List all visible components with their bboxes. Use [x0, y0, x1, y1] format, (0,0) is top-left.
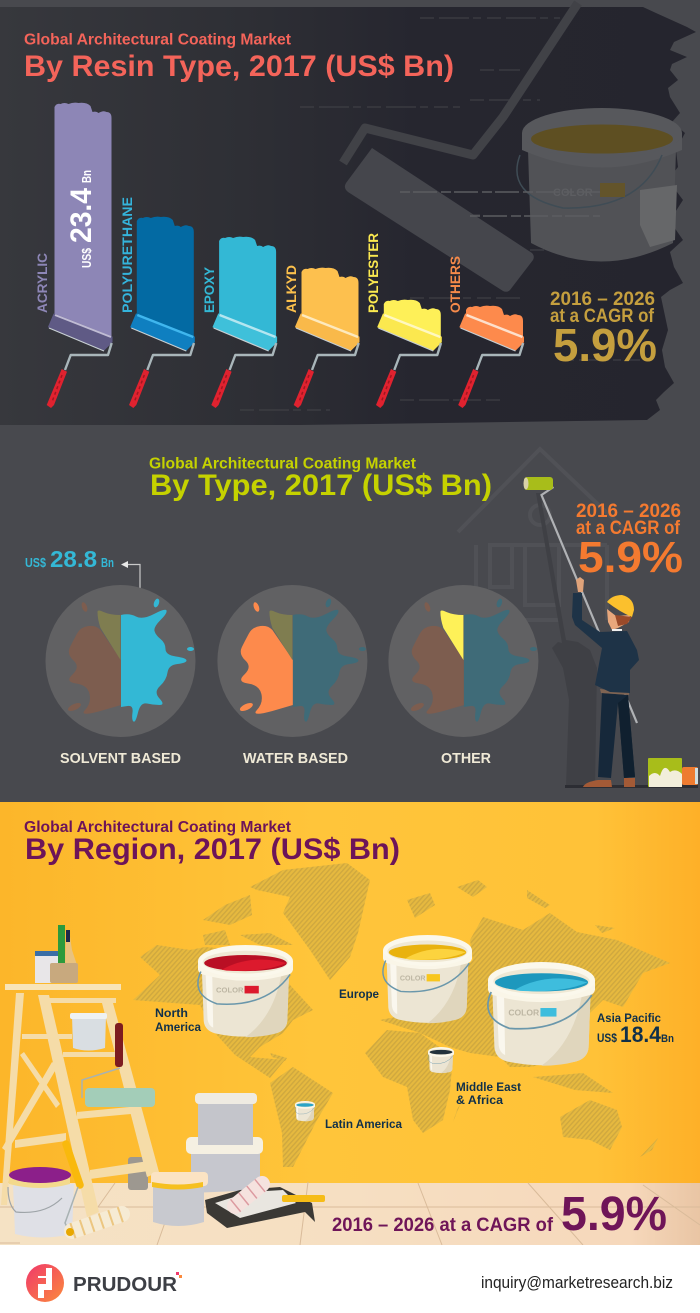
- light tin cap: [695, 768, 698, 784]
- paint tray with roller: [205, 1184, 325, 1228]
- label: middle east and africa: & Africa: [456, 1093, 503, 1107]
- hair: [615, 615, 632, 626]
- bar: epoxy: [202, 237, 277, 408]
- bucket: north america: [198, 945, 293, 1037]
- bar: acrylic: Bn: [79, 170, 94, 183]
- ghost paint bucket: COLOR: [553, 187, 593, 199]
- contact email: inquiry@marketresearch.biz: [481, 1274, 673, 1292]
- title: region: By Region, 2017 (US$ Bn): [25, 833, 400, 866]
- bar: others: OTHERS: [448, 256, 463, 313]
- label: north america: America: [155, 1020, 201, 1034]
- ghost house: [458, 449, 625, 620]
- painter with roller: [524, 477, 698, 788]
- roller pole: [542, 487, 637, 723]
- trousers: [598, 693, 635, 778]
- section background: type: [0, 428, 700, 802]
- label: other: OTHER: [441, 750, 491, 767]
- logo: prudour: PRUDOUR: [73, 1274, 178, 1296]
- callout: resin CAGR: [550, 289, 657, 371]
- label and value: asia pacific: [597, 1011, 674, 1047]
- value callout: solvent based: [25, 546, 114, 572]
- head: [607, 609, 630, 630]
- callout: region CAGR: 5.9%: [561, 1188, 667, 1241]
- africa: [365, 1030, 453, 1133]
- bar: others: [448, 256, 524, 408]
- yellow roller on floor: [65, 1144, 122, 1236]
- label: water based: WATER BASED: [243, 750, 348, 767]
- stack of grey buckets: [186, 1093, 263, 1193]
- bar: acrylic: ACRYLIC: [35, 253, 50, 313]
- section background: resin type: [0, 0, 700, 428]
- bar: epoxy: EPOXY: [202, 267, 217, 313]
- callout: type CAGR: 2016 – 2026: [576, 501, 681, 522]
- callout: resin CAGR: at a CAGR of: [550, 306, 655, 327]
- bucket: north america: COLOR: [216, 986, 244, 995]
- callout: region CAGR: 2016 – 2026 at a CAGR of: [332, 1215, 554, 1236]
- label and value: asia pacific: Asia Pacific: [597, 1011, 661, 1025]
- callout: resin CAGR: 5.9%: [553, 319, 657, 371]
- callout: resin CAGR: 2016 – 2026: [550, 289, 655, 310]
- label: north america: North: [155, 1006, 188, 1020]
- label: latin america: Latin America: [325, 1117, 402, 1131]
- ladder-top paint can and brushes: [35, 925, 78, 983]
- bar: polyester: POLYESTER: [366, 233, 381, 313]
- title: type: By Type, 2017 (US$ Bn): [150, 469, 492, 502]
- bucket: middle east and africa: [428, 1047, 454, 1073]
- callout: type CAGR: 5.9%: [578, 533, 683, 582]
- man's shadow: [536, 493, 597, 786]
- title: resin type: Global Architectural Coating Market: [24, 32, 292, 48]
- label: middle east and africa: [456, 1080, 521, 1107]
- bucket: europe: COLOR: [400, 973, 426, 983]
- bar: alkyd: ALKYD: [284, 265, 299, 313]
- bucket: europe: [383, 935, 472, 1023]
- value callout: solvent based: US$: [25, 555, 47, 570]
- ghost paint roller: [343, 3, 578, 292]
- north america: [133, 945, 313, 1078]
- arrow: solvent value: [121, 561, 140, 588]
- collar: [612, 629, 622, 631]
- world map: [133, 863, 670, 1167]
- value callout: solvent based: Bn: [101, 555, 114, 570]
- splat: solvent based: [46, 585, 196, 737]
- label and value: asia pacific: Bn: [661, 1033, 674, 1045]
- title: region: Global Architectural Coating Market: [24, 819, 292, 836]
- bar: acrylic: [35, 103, 112, 408]
- value callout: solvent based: 28.8: [50, 546, 97, 572]
- step ladder: [1, 984, 159, 1217]
- roller on ladder: [82, 1023, 155, 1107]
- dark brush texture: [0, 7, 696, 425]
- label: north america: [155, 1006, 201, 1034]
- logo: prudour: [26, 1264, 182, 1302]
- south america: [270, 1067, 333, 1167]
- can drips: [649, 768, 682, 787]
- bar: polyester: [366, 233, 441, 408]
- floor tile lines: [0, 1182, 700, 1245]
- ghost paint bucket: [400, 108, 682, 262]
- bucket: asia pacific: [488, 962, 595, 1066]
- paint streak texture: [240, 18, 640, 410]
- floor: [0, 1183, 700, 1245]
- title: type: Global Architectural Coating Market: [149, 456, 417, 472]
- bucket: asia pacific: COLOR: [508, 1008, 539, 1018]
- label: middle east and africa: Middle East: [456, 1080, 521, 1094]
- bucket on ladder step: [70, 1013, 107, 1050]
- bar: polyurethane: [120, 197, 194, 408]
- callout: type CAGR: [576, 501, 683, 582]
- greenland: [250, 863, 370, 980]
- label and value: asia pacific: 18.4: [620, 1022, 662, 1047]
- bucket: latin america: [295, 1101, 315, 1121]
- paint can behind ladder: [128, 1157, 148, 1190]
- title: resin type: By Resin Type, 2017 (US$ Bn): [24, 50, 454, 83]
- title: region: [24, 819, 400, 866]
- arctic islands: [203, 895, 293, 1061]
- belt: [600, 689, 629, 695]
- section background: region wall: [0, 802, 700, 1186]
- eurasia: [380, 913, 670, 1067]
- bar: alkyd: [284, 265, 359, 408]
- australia and islands: [407, 880, 658, 1157]
- yellow-band bucket: [151, 1172, 208, 1226]
- hand: [576, 577, 584, 592]
- orange tin: [682, 767, 698, 785]
- green paint can: [648, 758, 682, 787]
- shoes: [583, 778, 635, 787]
- callout: type CAGR: at a CAGR of: [576, 518, 681, 539]
- title: type: [149, 456, 492, 502]
- label: solvent based: SOLVENT BASED: [60, 750, 181, 767]
- helmet: [607, 595, 634, 617]
- bar: acrylic: 23.4: [65, 188, 98, 243]
- callout: region CAGR: [332, 1188, 667, 1241]
- bar: acrylic: US$: [79, 247, 94, 268]
- footer band: [0, 1245, 700, 1313]
- title: resin type: [24, 32, 454, 83]
- splat: water based: [217, 585, 367, 737]
- bar: polyurethane: POLYURETHANE: [120, 197, 135, 313]
- purple-lid bucket: [8, 1167, 74, 1238]
- jacket: [572, 593, 639, 693]
- label and value: asia pacific: US$: [597, 1031, 617, 1045]
- splat: other: [388, 585, 538, 737]
- label: europe: Europe: [339, 987, 379, 1001]
